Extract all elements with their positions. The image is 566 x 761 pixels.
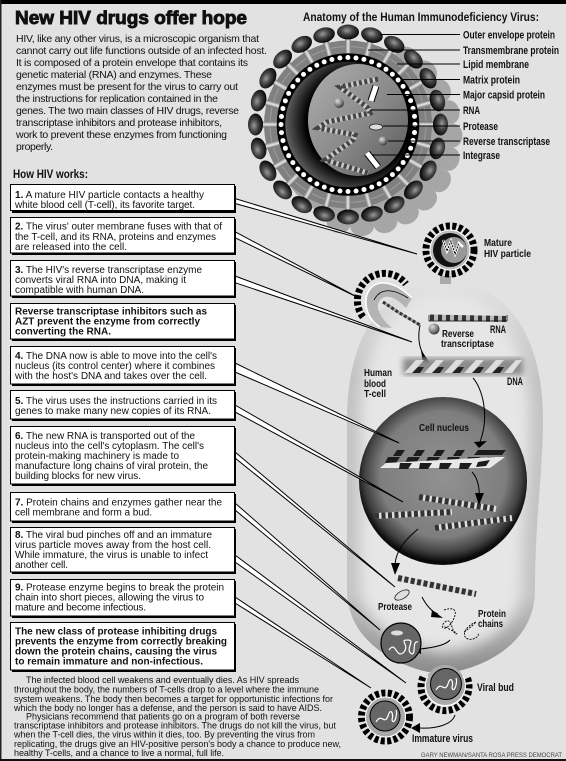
step 2 box: 2. The virus' outer membrane fuses with that of	[15, 222, 222, 232]
label: human blood T-cell	[364, 367, 392, 400]
step 5 box: 5. The virus uses the instructions carried in its	[15, 396, 217, 407]
closing text: replicating, the drugs give an HIV-positive person's body a chance to produce new,	[14, 739, 341, 749]
label: reverse transcriptase: Reverse	[442, 328, 474, 340]
step 4 box: with the host's DNA and takes over the cell.	[14, 371, 207, 382]
callout: reverse transcriptase inhibitors: Reverse transcriptase inhibitors such as	[15, 306, 207, 318]
intro text: work to prevent these enzymes from functioning	[15, 129, 227, 141]
step 7 box	[10, 492, 236, 523]
anatomy labels	[463, 30, 559, 162]
viral RNA in cell	[429, 315, 507, 321]
step 9 box	[10, 580, 236, 618]
step 3 box: compatible with human DNA.	[15, 285, 144, 296]
panel: anatomy of the virus	[248, 10, 559, 236]
anatomy labels: Integrase	[463, 150, 500, 162]
intro text	[15, 33, 267, 153]
closing text: when the T-cell dies, the virus within it dies, too. By preventing the virus from	[13, 730, 315, 740]
step 9 box: mature and become infectious.	[15, 602, 146, 614]
closing text	[13, 675, 341, 758]
step 8 box: While immature, the virus is unable to infect	[15, 550, 208, 561]
immature virus	[362, 693, 410, 741]
protein chain fragments	[442, 609, 478, 639]
protein chain	[398, 578, 476, 594]
intro text: enzymes must be present for the virus to carry out	[16, 81, 238, 93]
mature HIV particle	[426, 226, 474, 284]
intro text: genes. The two main classes of HIV drugs, reverse	[16, 105, 239, 117]
protease enzyme	[393, 588, 411, 602]
step 1 box: white blood cell (T-cell), its favorite target.	[14, 200, 195, 211]
step 2 box: the T-cell, and its RNA, proteins and enzymes	[15, 232, 216, 243]
step 4 box: nucleus (its control center) where it combines	[15, 361, 215, 372]
label: human blood T-cell: T-cell	[364, 388, 386, 400]
cell nucleus	[359, 397, 527, 565]
callout: protease inhibitors: to remain immature and non-infectious.	[15, 656, 203, 668]
callout: reverse transcriptase inhibitors	[10, 304, 236, 341]
step 2 box: are released into the cell.	[15, 242, 127, 253]
step 6 box: manufacture long chains of viral protein, the	[15, 461, 208, 472]
step 3 box: 3. The HIV's reverse transcriptase enzyme	[15, 265, 202, 276]
T-cell	[347, 282, 543, 672]
label: viral bud: Viral bud	[477, 682, 514, 694]
step 6 box: nucleus into the cell's cytoplasm. The cell's	[15, 441, 204, 452]
closing text: Physicians recommend that patients go on a program of both reverse	[26, 712, 300, 722]
step 8 box: another cell.	[15, 560, 68, 571]
closing text: which the body no longer has a defense, and the person is said to have AIDS.	[13, 703, 322, 713]
label: protein chains	[478, 608, 506, 630]
label: protease: Protease	[378, 601, 412, 613]
label: protein chains: chains	[478, 618, 503, 630]
step 6 box: protein-making machinery is made to	[15, 451, 179, 462]
how HIV works heading: How HIV works:	[13, 167, 88, 181]
step 1 box: 1. A mature HIV particle contacts a healthy	[15, 190, 204, 201]
fusing virus particle	[357, 273, 420, 328]
step 6 box: 6. The new RNA is transported out of the	[15, 431, 195, 442]
anatomy labels: Lipid membrane	[463, 59, 529, 71]
RNA strands	[375, 497, 512, 528]
label: immature virus: Immature virus	[412, 733, 473, 745]
virus diagram	[248, 24, 462, 236]
step 4 box	[10, 346, 236, 386]
label: RNA: RNA	[490, 324, 506, 336]
arrows inside cell	[391, 325, 487, 733]
step 5 box: genes to make many new copies of its RNA.	[15, 406, 211, 417]
callout: reverse transcriptase inhibitors: AZT prevent the enzyme from correctly	[15, 316, 200, 328]
step 6 box	[10, 426, 236, 486]
callout: protease inhibitors: The new class of protease inhibiting drugs	[15, 626, 217, 638]
label: protein chains: Protein	[478, 608, 506, 620]
label: mature HIV particle	[484, 237, 531, 260]
intro text: HIV, like any other virus, is a microscopic organism that	[16, 33, 259, 45]
label: DNA: DNA	[507, 376, 523, 388]
step 9 box: chain into short pieces, allowing the virus to	[15, 592, 204, 604]
step 2 box	[10, 218, 236, 255]
reverse transcriptase ball	[428, 324, 440, 334]
label: human blood T-cell: Human	[364, 367, 392, 379]
step 8 box: virus particle moves away from the host cell.	[15, 540, 211, 551]
step 7 box: cell membrane and form a bud.	[15, 508, 152, 518]
callout: protease inhibitors	[10, 622, 236, 672]
step 3 box	[10, 260, 236, 298]
step 6 box: building blocks for new virus.	[15, 471, 141, 482]
label: mature HIV particle: HIV particle	[484, 248, 531, 260]
viral bud	[421, 665, 469, 711]
intro text: cannot carry out life functions outside of an infected host.	[16, 45, 267, 57]
anatomy labels: Matrix protein	[463, 74, 520, 86]
step 9 box: 9. Protease enzyme begins to break the protein	[15, 582, 224, 594]
leader lines	[368, 34, 460, 155]
closing text: healthy T-cells, and a chance to live a normal, full life.	[14, 748, 224, 758]
intro text: the instructions for replication contained in the	[16, 93, 218, 105]
leader wedges from step boxes	[235, 198, 417, 688]
callout: reverse transcriptase inhibitors: converting the RNA.	[15, 326, 111, 338]
step 7 box: 7. Protein chains and enzymes gather near the	[15, 498, 222, 508]
DNA strand	[403, 358, 523, 375]
enclosed protein circle	[381, 623, 421, 663]
label: reverse transcriptase	[441, 328, 494, 350]
title: New HIV drugs offer hope	[15, 8, 247, 28]
anatomy labels: Protease	[463, 121, 498, 133]
intro text: properly.	[16, 141, 53, 153]
intro text: genetic material (RNA) and enzymes. These	[16, 69, 212, 81]
step 8 box	[10, 528, 236, 574]
step 5 box	[10, 390, 236, 421]
callout: protease inhibitors: prevents the enzyme from correctly breaking	[15, 636, 227, 648]
nucleus DNA	[380, 450, 506, 469]
closing text: transcriptase inhibitors and protease inhibitors. The drugs do not kill the virus, but	[14, 720, 336, 730]
label: human blood T-cell: blood	[364, 378, 386, 390]
step 4 box: 4. The DNA now is able to move into the cell's	[15, 351, 217, 362]
closing text: system weakens. The body then becomes a target for opportunistic infections for	[14, 694, 333, 704]
callout: protease inhibitors: down the protein chains, causing the virus	[15, 646, 217, 658]
label: mature HIV particle: Mature	[484, 237, 512, 249]
intro text: transcriptase inhibitors and protease inhibitors,	[16, 117, 222, 129]
closing text: The infected blood cell weakens and eventually dies. As HIV spreads	[26, 675, 300, 685]
label: reverse transcriptase: transcriptase	[441, 338, 494, 350]
anatomy labels: RNA	[463, 105, 480, 117]
step 8 box: 8. The viral bud pinches off and an immature	[15, 530, 212, 541]
step 3 box: converts viral RNA into DNA, making it	[15, 275, 186, 286]
closing text: throughout the body, the numbers of T-cells drop to a level where the immune	[14, 684, 319, 694]
nucleus label: Cell nucleus	[419, 422, 469, 434]
step 1 box	[10, 184, 236, 213]
intro text: It is composed of a protein envelope that contains its	[16, 57, 248, 69]
